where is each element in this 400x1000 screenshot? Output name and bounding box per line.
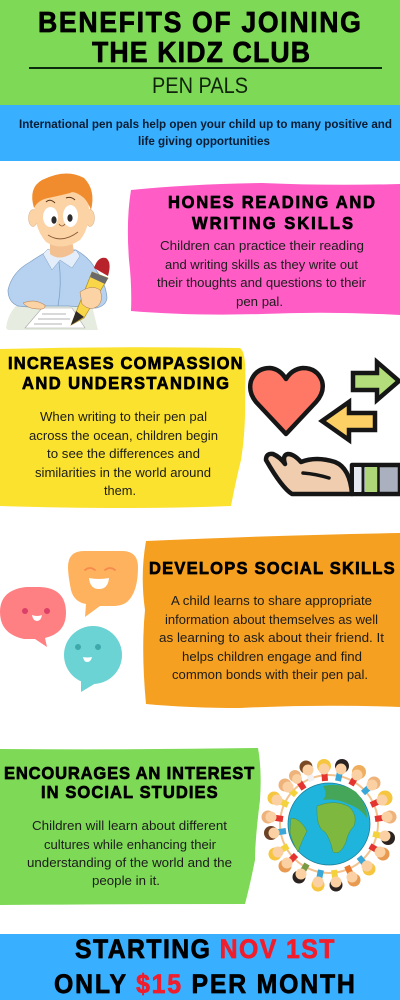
icon: yellow arrow xyxy=(322,402,375,440)
text block xyxy=(159,594,385,682)
text block: Children will learn about different xyxy=(32,819,228,833)
heading: HONES READING AND xyxy=(168,191,375,212)
title: BENEFITS OF JOINING xyxy=(38,6,361,38)
icon: red bubble xyxy=(0,587,66,647)
icon: heart xyxy=(250,368,323,434)
footer line: price: ONLY $15 PER MONTH xyxy=(54,970,355,999)
subtitle: PEN PALS xyxy=(152,73,248,98)
text block: pen pal. xyxy=(236,295,283,309)
intro band: life giving opportunities xyxy=(138,135,270,148)
text block: them. xyxy=(104,484,136,498)
icon: orange bubble xyxy=(68,551,138,617)
icon: teal bubble xyxy=(64,626,122,692)
text block: and writing skills as they write out xyxy=(165,258,359,272)
text block xyxy=(29,410,218,498)
heading: DEVELOPS SOCIAL SKILLS xyxy=(149,557,395,578)
icon: globe ringed with children xyxy=(262,759,396,892)
heading: ENCOURAGES AN INTEREST xyxy=(4,762,255,783)
text block xyxy=(27,819,232,888)
text block: A child learns to share appropriate xyxy=(171,594,372,608)
text block: Children can practice their reading xyxy=(160,239,364,253)
children ring xyxy=(262,759,396,892)
text block: people in it. xyxy=(92,874,160,888)
text block: to see the differences and xyxy=(47,447,200,461)
header band xyxy=(0,0,400,105)
text block: as learning to ask about their friend. It xyxy=(159,631,385,645)
heading xyxy=(4,762,255,802)
footer band xyxy=(0,934,400,1000)
panel: reading and writing xyxy=(128,183,400,315)
panel: social studies xyxy=(0,748,261,905)
heading: WRITING SKILLS xyxy=(192,212,353,233)
icon: green arrow xyxy=(353,362,399,400)
heading: AND UNDERSTANDING xyxy=(22,372,229,393)
text block: their thoughts and questions to their xyxy=(157,276,366,290)
icon: boy writing with pencil xyxy=(6,173,110,330)
text block: information about themselves as well xyxy=(165,613,378,627)
text block xyxy=(157,239,366,309)
panel: compassion and understanding xyxy=(0,347,245,508)
title xyxy=(38,6,361,68)
intro band: International pen pals help open your child up to many positive and xyxy=(19,118,392,131)
intro band xyxy=(0,105,400,161)
heading xyxy=(8,352,243,393)
title: THE KIDZ CLUB xyxy=(92,36,310,68)
text block: across the ocean, children begin xyxy=(29,429,218,443)
text block: When writing to their pen pal xyxy=(40,410,207,424)
footer line: start date: STARTING NOV 1ST xyxy=(75,935,335,964)
panel: social skills xyxy=(143,533,400,708)
globe xyxy=(288,783,370,865)
text block: helps children engage and find xyxy=(182,650,362,664)
icon: heart, arrows and hand xyxy=(250,362,400,494)
heading xyxy=(168,191,375,233)
text block: similarities in the world around xyxy=(35,466,211,480)
text block: cultures while enhancing their xyxy=(44,838,216,852)
icon: hand xyxy=(266,454,352,494)
icon: speech bubbles xyxy=(0,551,138,692)
heading: INCREASES COMPASSION xyxy=(8,352,243,373)
text block: understanding of the world and the xyxy=(27,856,232,870)
text block: common bonds with their pen pal. xyxy=(172,668,368,682)
heading: IN SOCIAL STUDIES xyxy=(41,781,218,802)
